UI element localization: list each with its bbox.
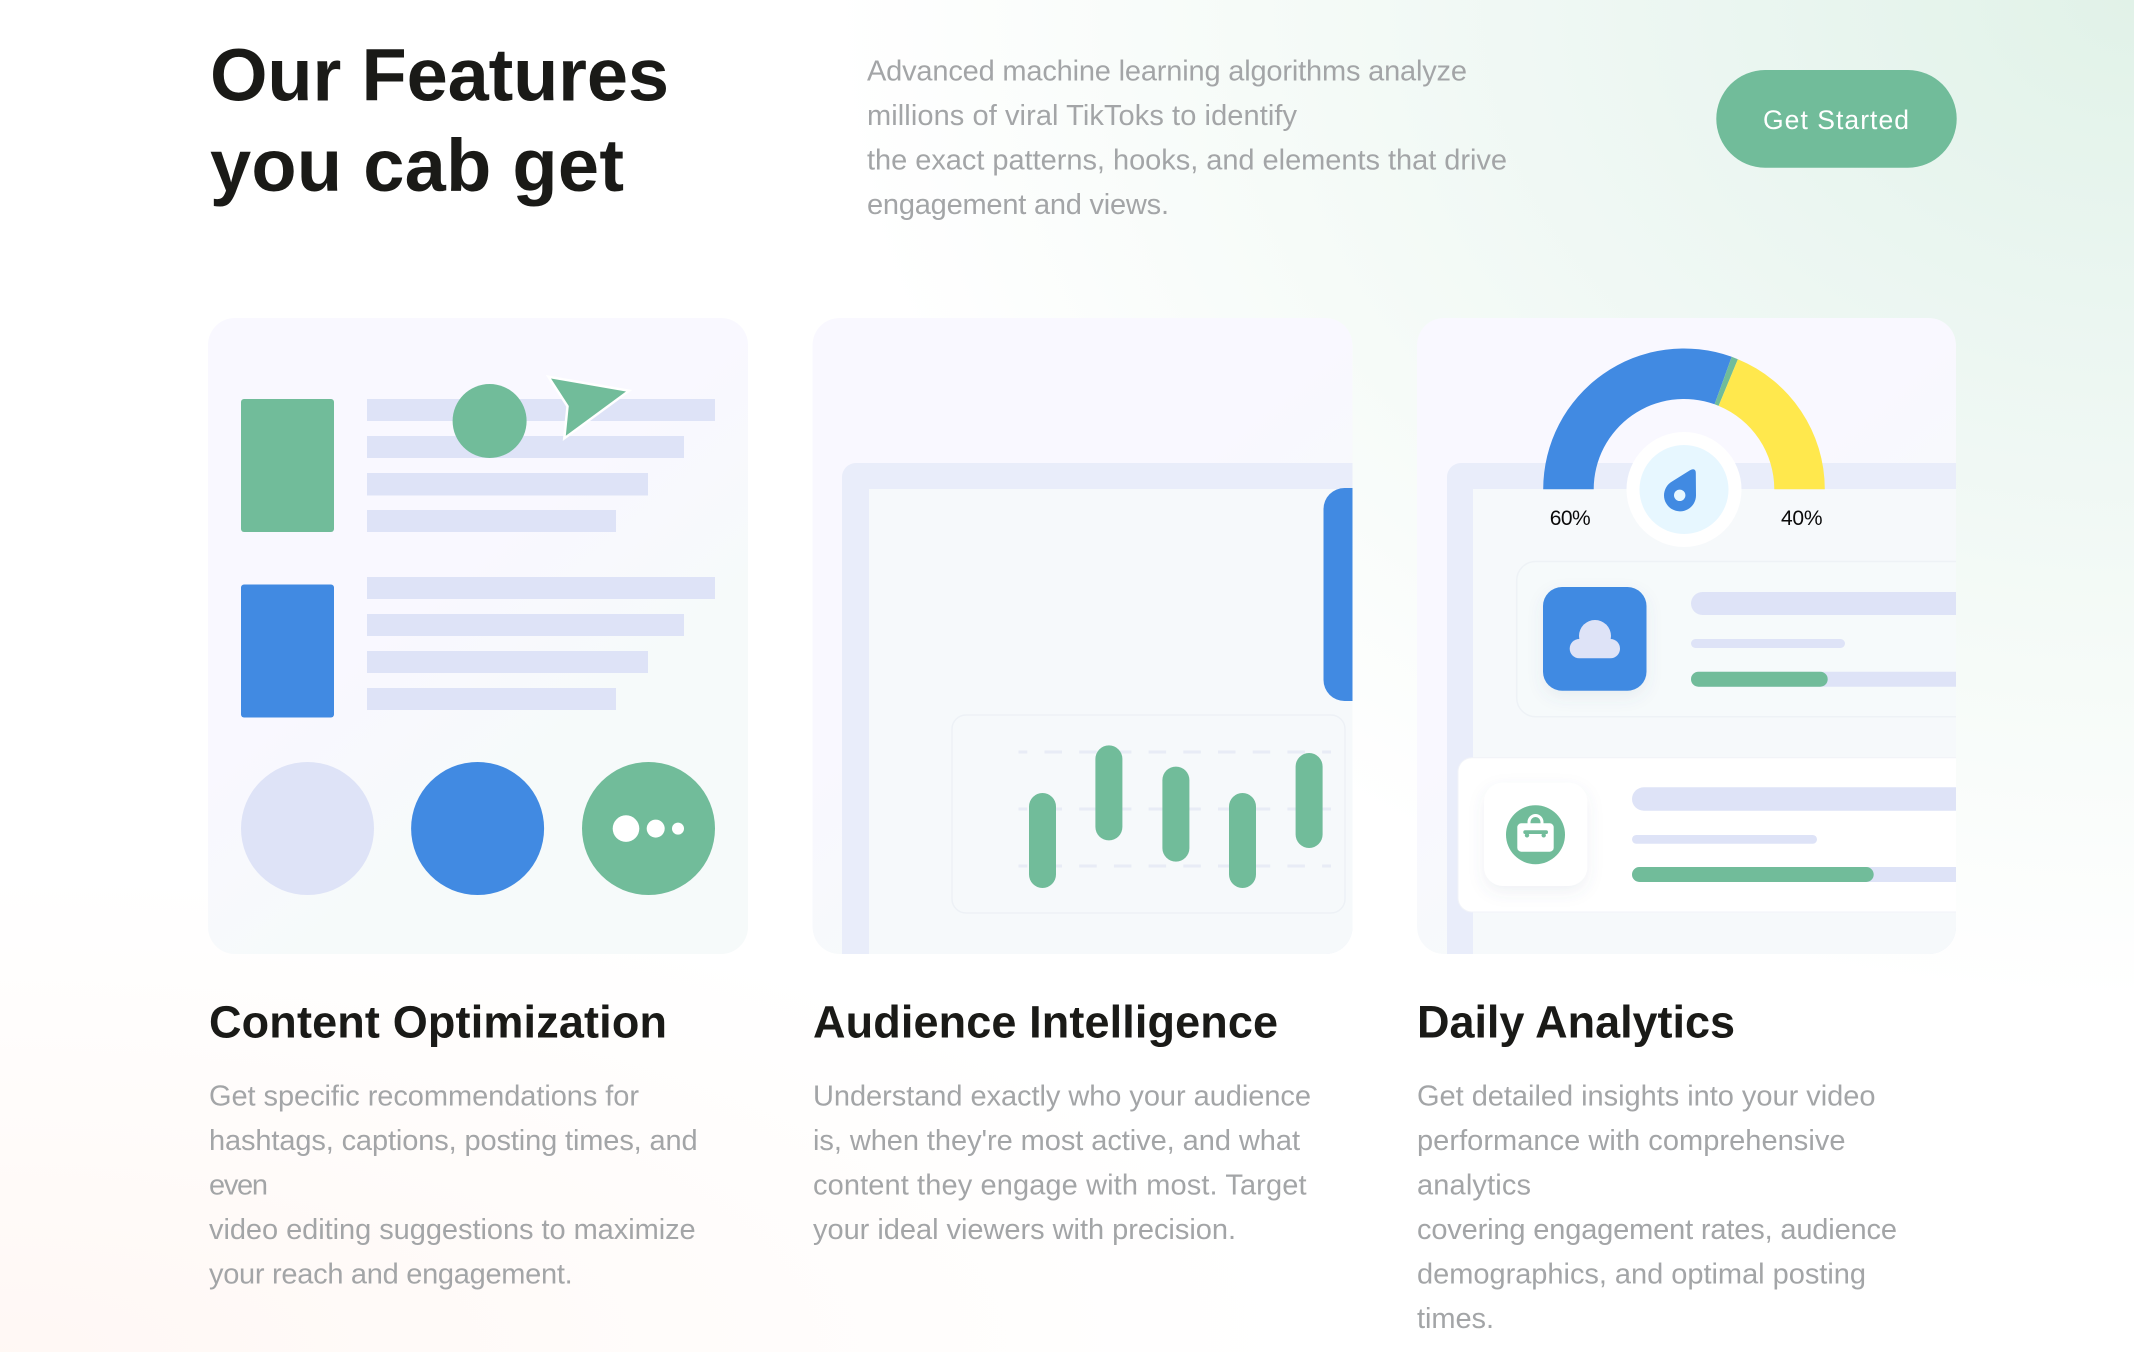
panel: audience intelligence illustration bbox=[824, 463, 1352, 954]
title: Our Features bbox=[210, 34, 669, 116]
intro description: millions of viral TikToks to identify bbox=[867, 100, 1298, 132]
text: audience intelligence description bbox=[813, 1081, 1311, 1246]
text: audience intelligence description: content they engage with most. Target bbox=[813, 1170, 1306, 1202]
intro description: engagement and views. bbox=[867, 189, 1169, 221]
floating green circle bbox=[453, 384, 527, 458]
row card two bbox=[1458, 758, 1956, 912]
text: daily analytics description: times. bbox=[1417, 1303, 1494, 1335]
row card one bbox=[1543, 587, 1956, 696]
progress value bbox=[1691, 672, 1828, 687]
text: content optimization description: your reach and engagement. bbox=[209, 1258, 573, 1290]
green circle with dots bbox=[582, 762, 715, 895]
text: content optimization description: hashtags, captions, posting times, and bbox=[209, 1125, 698, 1157]
heading: content optimization: Content Optimization bbox=[209, 997, 667, 1048]
progress track bbox=[1632, 867, 1956, 882]
text: content optimization description: video editing suggestions to maximize bbox=[209, 1214, 696, 1246]
gauge chart bbox=[1543, 348, 1825, 489]
button: get started bbox=[1716, 70, 1957, 168]
text: audience intelligence description: is, when they're most active, and what bbox=[813, 1125, 1300, 1157]
text: daily analytics description: performance with comprehensive bbox=[1417, 1125, 1846, 1157]
blue circle bbox=[411, 762, 544, 895]
blue thumbnail bbox=[241, 584, 334, 718]
text: content optimization description: Get specific recommendations for bbox=[209, 1081, 639, 1113]
text bars group two bbox=[367, 577, 715, 710]
text: content optimization description bbox=[209, 1081, 698, 1290]
subtitle bar bbox=[1632, 835, 1817, 844]
panel: daily analytics illustration bbox=[1429, 318, 1956, 954]
panel: content optimization illustration bbox=[208, 318, 748, 954]
text: daily analytics description bbox=[1417, 1081, 1897, 1335]
text: daily analytics description: Get detailed insights into your video bbox=[1417, 1081, 1876, 1113]
subtitle bar bbox=[1691, 639, 1845, 648]
progress track bbox=[1820, 672, 1956, 687]
gauge label 40%: 40% bbox=[1781, 507, 1822, 530]
title: you cab get bbox=[210, 124, 624, 207]
intro description bbox=[867, 56, 1507, 221]
icon: cloud tile bbox=[1543, 587, 1646, 691]
icon: gauge needle drop bbox=[1626, 445, 1742, 547]
intro description: Advanced machine learning algorithms analyze bbox=[867, 56, 1467, 88]
title bbox=[210, 34, 669, 207]
intro description: the exact patterns, hooks, and elements that drive bbox=[867, 144, 1507, 176]
text: audience intelligence description: Understand exactly who your audience bbox=[813, 1081, 1311, 1113]
text: content optimization description: even bbox=[209, 1170, 268, 1202]
text: daily analytics description: analytics bbox=[1417, 1170, 1531, 1202]
lavender circle bbox=[241, 762, 374, 895]
icon: shopping bag tile bbox=[1488, 805, 1584, 891]
window content bbox=[869, 489, 1369, 969]
text: daily analytics description: demographics, and optimal posting bbox=[1417, 1258, 1866, 1290]
window frame bbox=[1447, 463, 1956, 954]
title bar bbox=[1691, 592, 1956, 615]
text: daily analytics description: covering engagement rates, audience bbox=[1417, 1214, 1897, 1246]
chart bars bbox=[1029, 745, 1323, 888]
heading: daily analytics: Daily Analytics bbox=[1417, 997, 1735, 1048]
icon: cursor arrow bbox=[551, 378, 626, 436]
progress value bbox=[1632, 867, 1874, 882]
green thumbnail bbox=[241, 399, 334, 532]
chart box bbox=[952, 715, 1345, 913]
blue side pill bbox=[1324, 488, 1352, 701]
text: audience intelligence description: your ideal viewers with precision. bbox=[813, 1214, 1236, 1246]
gauge label 60%: 60% bbox=[1550, 507, 1591, 530]
heading: audience intelligence: Audience Intelligence bbox=[813, 997, 1278, 1048]
window frame bbox=[842, 463, 1352, 954]
window content bbox=[1473, 489, 1956, 954]
title bar bbox=[1632, 787, 1956, 811]
text bars group one bbox=[367, 399, 715, 532]
button: get started: Get Started bbox=[1763, 105, 1909, 135]
